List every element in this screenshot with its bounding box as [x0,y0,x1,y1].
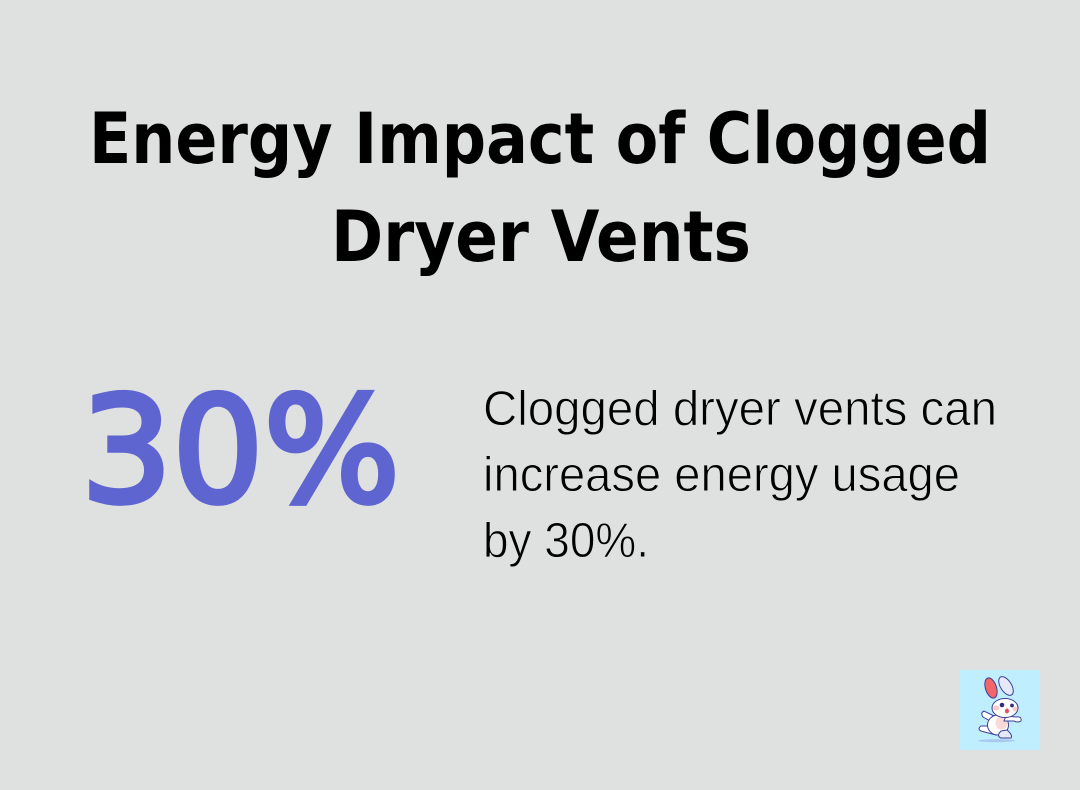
statistic: 30%: 30% [81,366,400,536]
body [988,715,1008,735]
mouth [1005,708,1009,714]
head [992,698,1018,718]
icon background [960,670,1040,750]
icon: running bunny logo [960,670,1040,750]
title [89,98,991,278]
right foot [998,730,1012,738]
ground shadow [978,739,1015,742]
cheeks [992,706,1000,710]
left arm [982,711,994,722]
description text: Clogged dryer vents can [483,382,997,436]
left ear [983,676,999,700]
title: Dryer Vents [331,196,751,278]
description text [483,382,997,568]
left leg [979,726,996,735]
right arm [1004,716,1021,722]
description text: by 30%. [483,514,649,568]
title: Energy Impact of Clogged [89,98,991,180]
right ear [996,674,1016,698]
description text: increase energy usage [483,448,960,502]
eyes [1000,703,1004,707]
belly [996,716,1008,730]
